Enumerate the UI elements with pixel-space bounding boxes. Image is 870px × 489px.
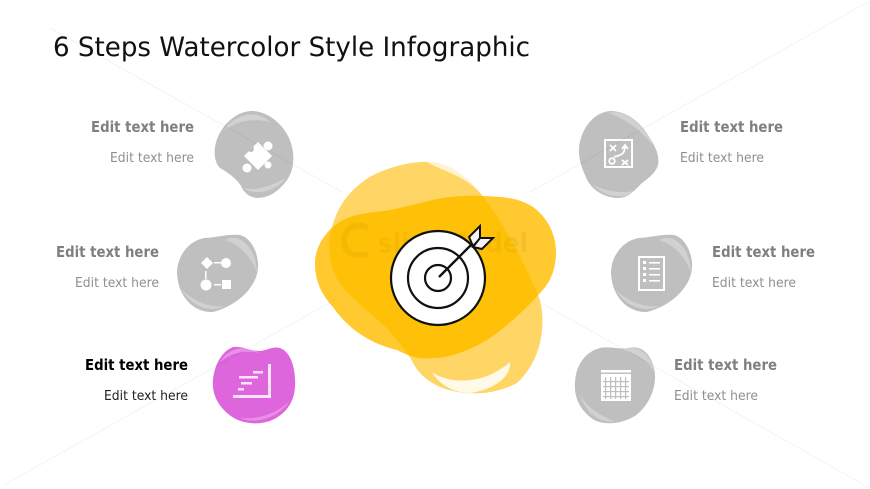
icon: calendar xyxy=(601,370,631,401)
blob xyxy=(213,347,295,423)
step 1: puzzle xyxy=(91,111,293,198)
icon: puzzle piece xyxy=(242,142,272,172)
step 3: stairs, active xyxy=(85,347,295,423)
label: Edit text here xyxy=(104,389,188,404)
blob xyxy=(579,111,658,198)
label: Edit text here xyxy=(56,243,159,261)
label: Edit text here xyxy=(680,118,783,136)
icon: target with arrow xyxy=(391,226,493,325)
watermark: slideModel xyxy=(378,228,528,259)
label: Edit text here xyxy=(712,243,815,261)
label xyxy=(674,356,777,404)
label: Edit text here xyxy=(712,276,796,291)
label: Edit text here xyxy=(674,356,777,374)
blob xyxy=(575,347,655,423)
label xyxy=(85,356,188,404)
blob xyxy=(215,111,293,198)
icon: flowchart xyxy=(200,257,231,290)
label xyxy=(91,118,194,166)
label: Edit text here xyxy=(110,151,194,166)
label: Edit text here xyxy=(680,151,764,166)
label: Edit text here xyxy=(85,356,188,374)
step 5: checklist xyxy=(611,235,815,312)
label xyxy=(712,243,815,291)
icon: stairs chart xyxy=(233,364,271,398)
blob overlap xyxy=(329,196,538,358)
step 4: strategy plan xyxy=(579,111,783,198)
title: 6 Steps Watercolor Style Infographic xyxy=(53,32,530,63)
icon: checklist xyxy=(639,257,664,290)
label xyxy=(680,118,783,166)
step 2: flowchart xyxy=(56,235,258,312)
upper light blob xyxy=(329,162,542,393)
blob xyxy=(611,235,692,312)
step 6: calendar xyxy=(575,347,777,423)
highlights xyxy=(424,160,510,393)
label xyxy=(56,243,159,291)
label: Edit text here xyxy=(674,389,758,404)
central watercolor blob xyxy=(315,160,556,393)
lower left blob xyxy=(315,196,556,359)
blob xyxy=(177,235,258,312)
icon: notebook plan xyxy=(605,140,632,167)
label: Edit text here xyxy=(75,276,159,291)
label: Edit text here xyxy=(91,118,194,136)
